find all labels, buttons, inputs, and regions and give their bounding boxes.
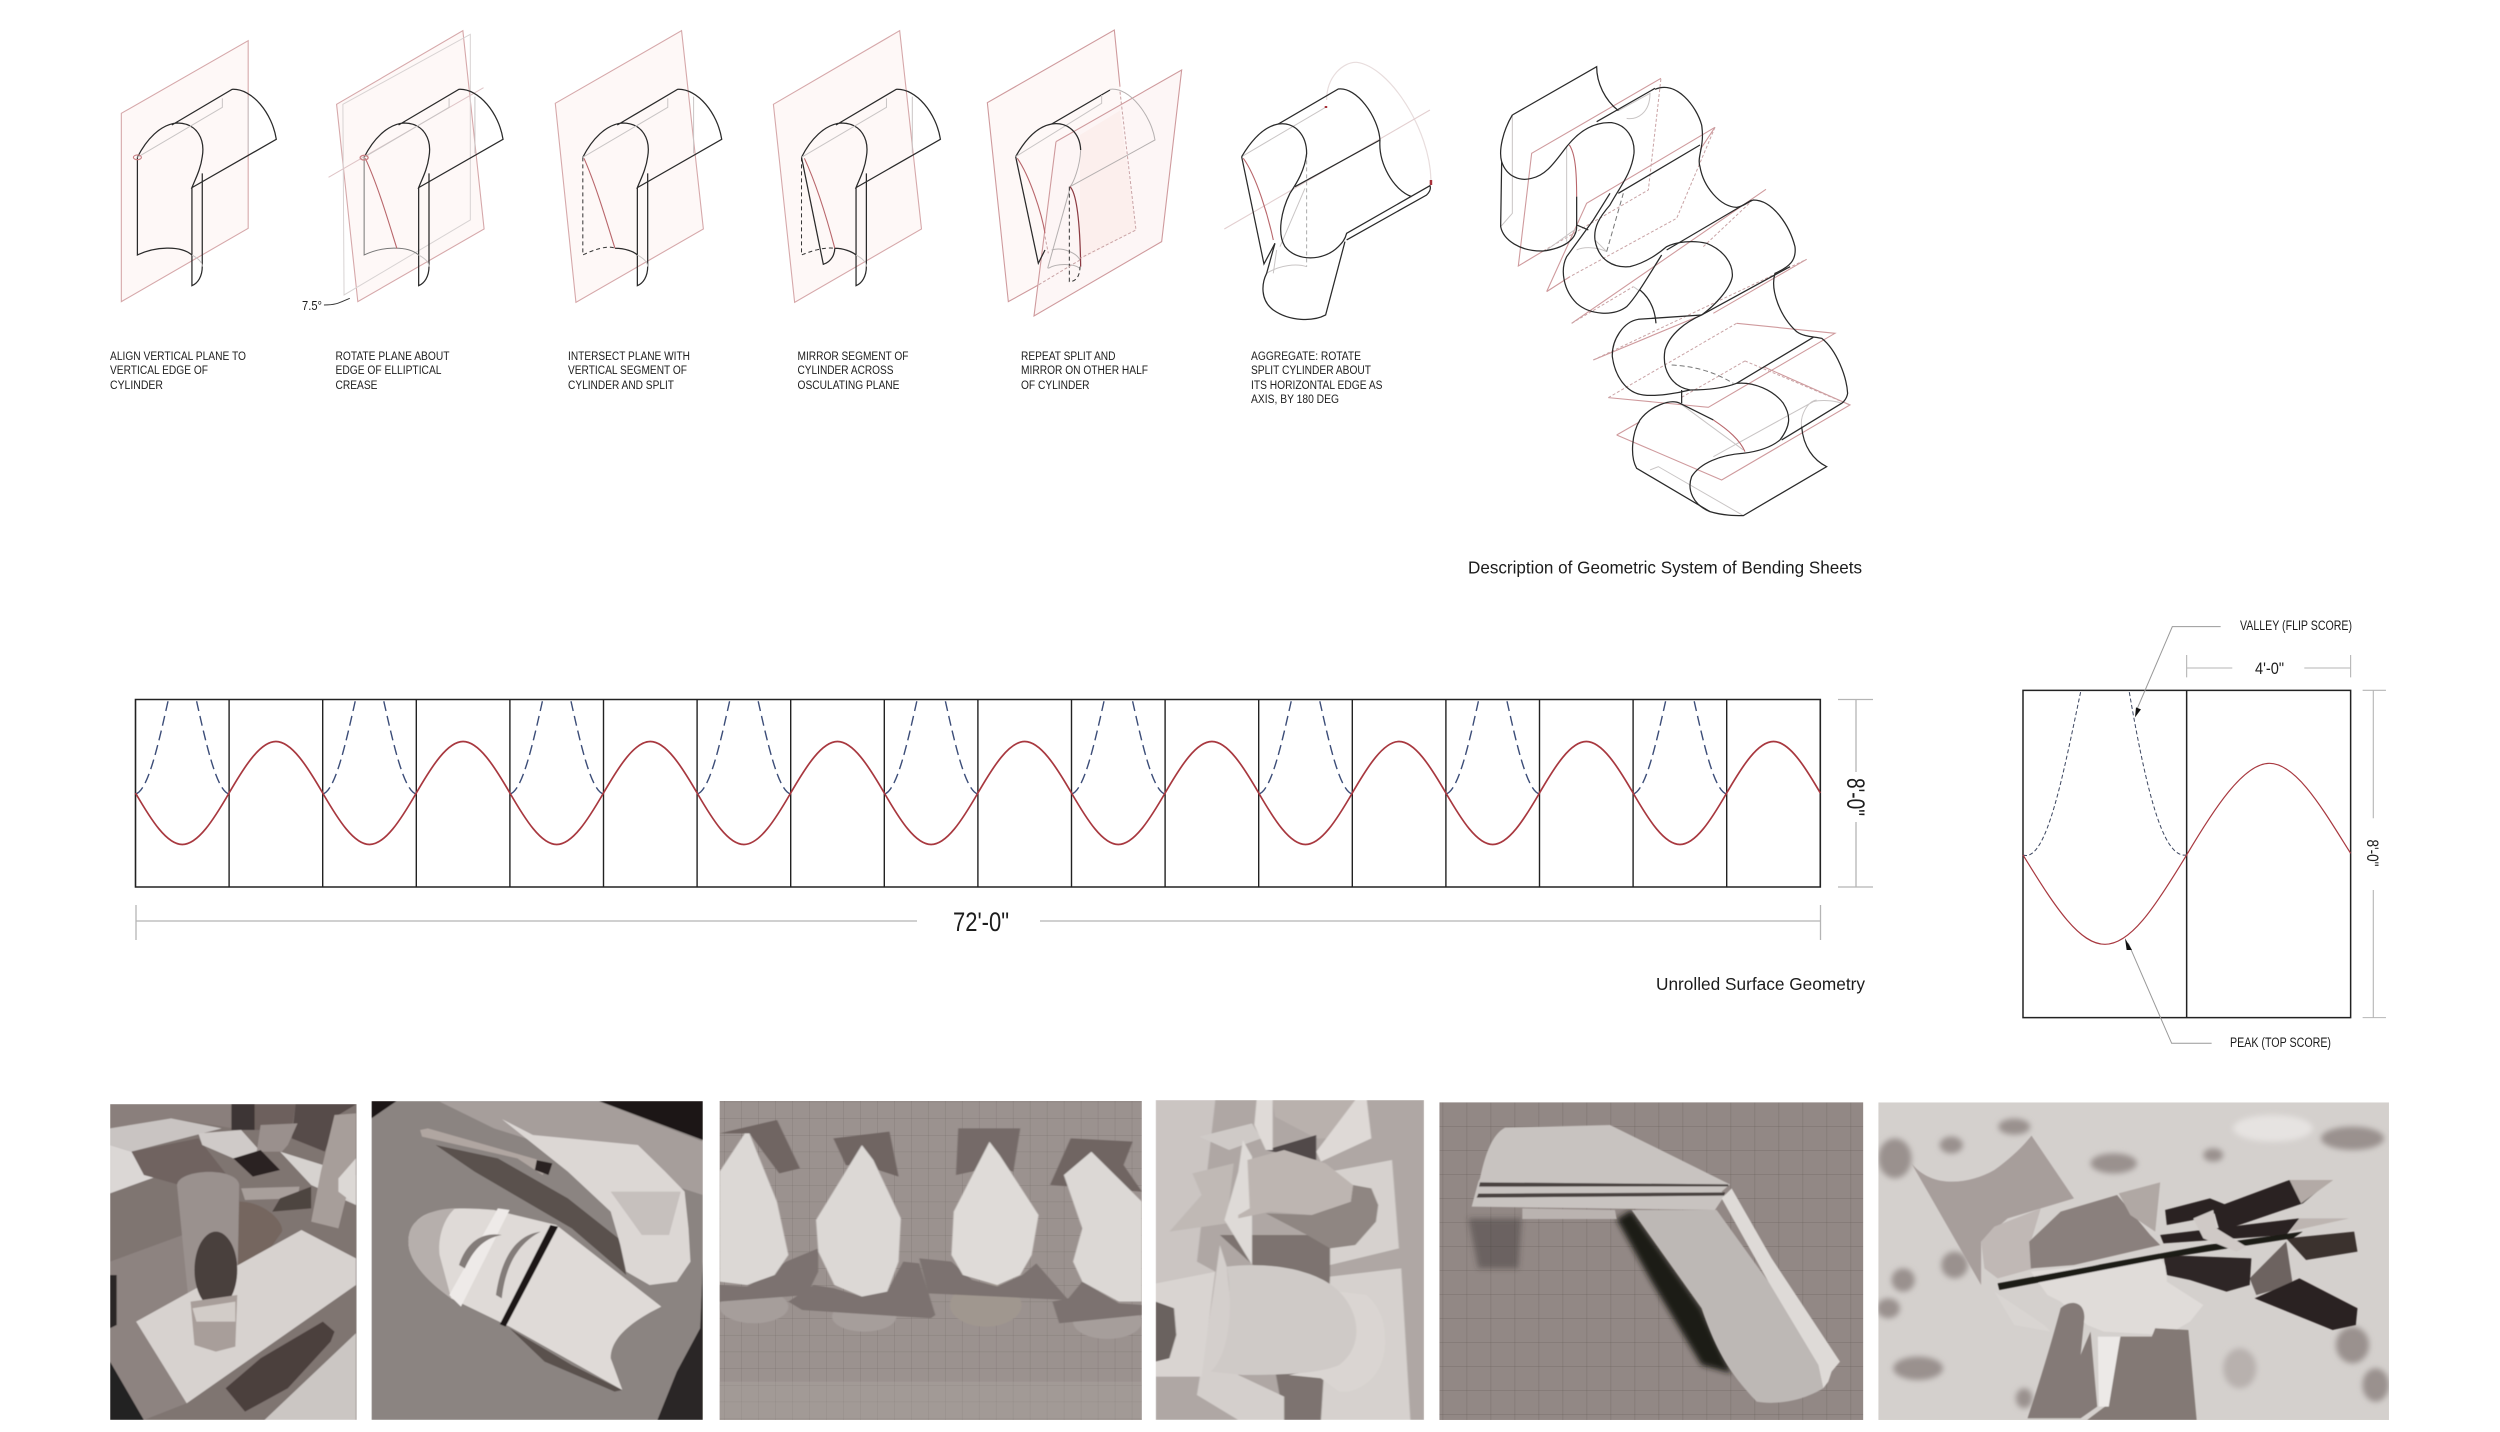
diagram: step 4 mirror segment: [773, 31, 940, 302]
photo 4: wood shells on plywood: [1156, 1100, 1424, 1420]
dimension: 72 feet: [136, 905, 1820, 940]
dimension: 72 feet: 72'-0": [953, 907, 1009, 937]
angle label 7.5 degrees: 7.5°: [302, 298, 322, 313]
label: 8 feet: 8'-0": [2363, 840, 2382, 866]
dimension: 8 feet strip: 8'-0": [1841, 778, 1869, 816]
valley score dashed curves: [136, 699, 1727, 794]
step 3 caption: INTERSECT PLANE WITH: [568, 351, 690, 363]
caption: unrolled surface: Unrolled Surface Geometry: [1656, 974, 1865, 994]
step 6 caption: AXIS, BY 180 DEG: [1251, 394, 1339, 406]
step 1 caption: CYLINDER: [110, 380, 163, 392]
step 4 caption: [798, 351, 908, 392]
step 6 caption: AGGREGATE: ROTATE: [1251, 351, 1361, 363]
valley dashed curves: [2023, 690, 2187, 856]
step 2 caption: EDGE OF ELLIPTICAL: [336, 365, 442, 377]
step 1 caption: VERTICAL EDGE OF: [110, 365, 208, 377]
label: valley: VALLEY (FLIP SCORE): [2240, 618, 2352, 633]
step 5 caption: MIRROR ON OTHER HALF: [1021, 365, 1148, 377]
label: peak: PEAK (TOP SCORE): [2230, 1035, 2331, 1050]
diagram: aggregated bending sheet: [1501, 67, 1850, 516]
photo 1: acrylic tube on wood sheet: [110, 1104, 357, 1420]
diagram: step 1 align plane: [121, 41, 276, 302]
leaders and arrows: [2128, 627, 2221, 1043]
step 2 caption: CREASE: [336, 380, 378, 392]
diagram: step 3 intersect plane: [555, 31, 722, 302]
label: 4 feet: 4'-0": [2255, 659, 2284, 678]
photo 6: clamped model held in hand: [1877, 1102, 2389, 1420]
diagram: step 5 repeat split: [987, 30, 1182, 316]
step 2 caption: ROTATE PLANE ABOUT: [336, 351, 450, 363]
peak score sine curve: [136, 742, 1820, 844]
step 6 caption: SPLIT CYLINDER ABOUT: [1251, 365, 1371, 377]
unrolled surface strip: [136, 699, 1820, 887]
step 6 caption: [1251, 351, 1383, 406]
diagram: step 6 aggregate rotation: [1224, 62, 1431, 319]
step 4 caption: MIRROR SEGMENT OF: [798, 351, 908, 363]
step 6 caption: ITS HORIZONTAL EDGE AS: [1251, 380, 1383, 392]
photo 3: four mirrored shells on cutting mat: [720, 1101, 1142, 1420]
diagram: step 2 rotate plane: [324, 31, 503, 305]
peak sine curve: [2023, 763, 2351, 944]
step 4 caption: OSCULATING PLANE: [798, 380, 900, 392]
step 3 caption: VERTICAL SEGMENT OF: [568, 365, 687, 377]
step 1 caption: ALIGN VERTICAL PLANE TO: [110, 351, 246, 363]
step 4 caption: CYLINDER ACROSS: [798, 365, 894, 377]
detail panel: single module: [2023, 627, 2386, 1043]
step 5 caption: [1021, 351, 1148, 392]
step 3 caption: [568, 351, 690, 392]
dimension: 8 feet strip: [1838, 700, 1873, 887]
photo 5: stacked sheets and rolled veneer: [1439, 1102, 1863, 1420]
dimensions: [2187, 655, 2386, 1018]
step 5 caption: REPEAT SPLIT AND: [1021, 351, 1116, 363]
step 2 caption: [336, 351, 450, 392]
step 1 caption: [110, 351, 246, 392]
step 3 caption: CYLINDER AND SPLIT: [568, 380, 674, 392]
step 5 caption: OF CYLINDER: [1021, 380, 1090, 392]
caption: geometric system: Description of Geometric System of Bending Sheets: [1468, 558, 1862, 578]
photo 2: two bent veneer models on mat: [371, 1101, 703, 1420]
